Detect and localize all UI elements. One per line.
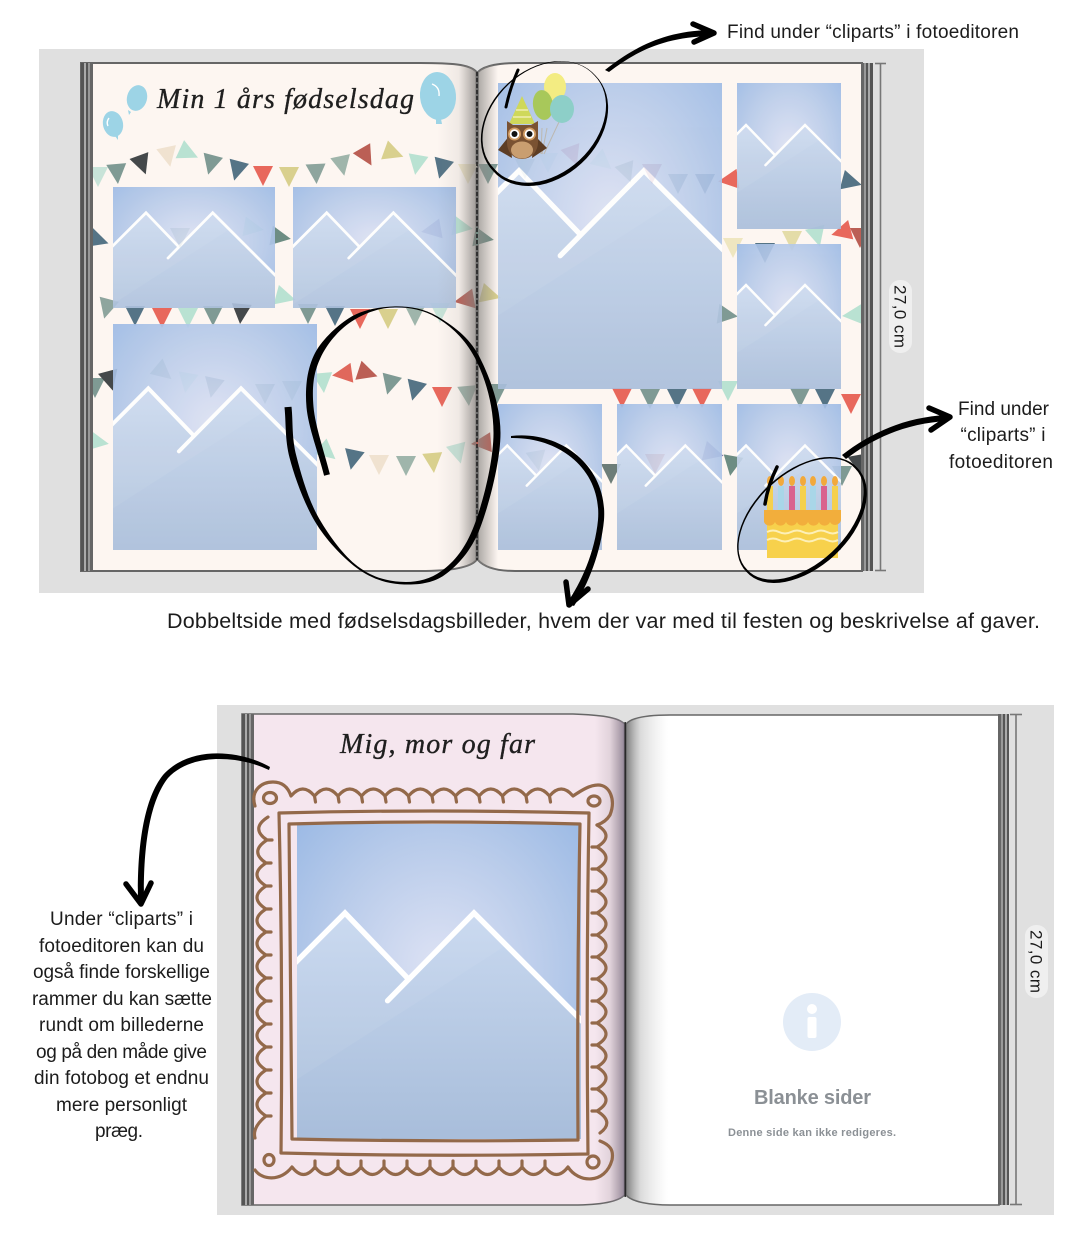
panel: bottom spread background	[217, 705, 1054, 1215]
title: Mig, mor og far: Mig, mor og far	[339, 729, 535, 760]
caption: left column: rundt om billederne	[39, 1015, 204, 1036]
caption: right side	[949, 399, 1053, 473]
panel: top spread background	[39, 49, 924, 593]
dimension label top book: 27,0 cm	[890, 285, 910, 348]
right page edge stripes	[998, 714, 1009, 1205]
annotation circle: owl	[481, 61, 608, 186]
caption: left column: også finde forskellige	[33, 962, 210, 983]
dimension line top book	[875, 63, 886, 571]
caption: left column: Under “cliparts” i	[50, 909, 193, 930]
left page edge stripes	[81, 63, 93, 571]
photo placeholder 6	[737, 244, 841, 389]
icon: owl with party hat and balloons	[498, 73, 574, 159]
panel: bottom book spread	[242, 714, 1009, 1205]
annotation circle: empty area	[284, 306, 500, 585]
photo placeholder 5	[737, 83, 841, 229]
photo placeholder 8	[617, 404, 722, 550]
annotation circle: cake	[737, 457, 867, 583]
caption: right side: “cliparts” i	[960, 425, 1046, 446]
arrow: frame to left caption	[126, 753, 270, 904]
dimension label bottom book: 27,0 cm	[1026, 930, 1046, 993]
photo placeholder 3	[113, 324, 317, 550]
icon: info	[783, 993, 841, 1051]
arrow: owl to top caption	[605, 24, 714, 72]
spine dashed line	[476, 72, 478, 560]
photo placeholder 9	[737, 404, 841, 550]
heading: Blanke sider: Blanke sider	[754, 1087, 871, 1109]
left page	[81, 63, 476, 571]
photo placeholder 7	[498, 404, 602, 550]
caption: left column: og på den måde give	[36, 1042, 207, 1063]
photo placeholder in frame	[297, 824, 581, 1139]
caption: top right: Find under “cliparts” i fotoeditoren	[727, 22, 1019, 43]
photo placeholder 2	[293, 187, 456, 308]
caption: right side: Find under	[958, 399, 1050, 420]
arrow: empty area to caption	[511, 435, 604, 606]
icon: birthday cake	[764, 476, 841, 558]
caption: left column: præg.	[95, 1121, 143, 1142]
panel: top book spread	[81, 63, 873, 571]
left pink page	[242, 714, 624, 1205]
caption: left column	[32, 909, 212, 1142]
arrow: cake to side caption	[842, 408, 950, 459]
photo placeholder 4 large	[498, 83, 722, 389]
note: Denne side kan ikke redigeres: Denne side kan ikke redigeres.	[728, 1127, 896, 1139]
spine shading	[437, 63, 476, 571]
dimension line bottom book	[1010, 714, 1022, 1205]
caption: left column: din fotobog et endnu	[34, 1068, 209, 1089]
spine shadow left	[595, 715, 624, 1205]
right white page	[626, 715, 999, 1205]
left page edge stripes	[242, 714, 254, 1205]
right page	[478, 63, 862, 571]
caption: right side: fotoeditoren	[949, 452, 1053, 473]
right page edge stripes	[861, 63, 873, 571]
photo placeholder 1	[113, 187, 275, 308]
caption: spread description: Dobbeltside med fødselsdagsbilleder, hvem der var med til festen og beskrivelse af gaver.	[167, 609, 1040, 633]
title: Min 1 års fødselsdag: Min 1 års fødselsdag	[156, 84, 414, 115]
caption: left column: fotoeditoren kan du	[39, 936, 204, 957]
spine shadow right	[626, 715, 668, 1205]
decorative scalloped frame	[254, 782, 612, 1179]
icon: blue balloons	[101, 71, 458, 140]
bunting garlands	[85, 140, 871, 486]
caption: left column: rammer du kan sætte	[32, 989, 212, 1010]
caption: left column: mere personligt	[56, 1095, 188, 1116]
